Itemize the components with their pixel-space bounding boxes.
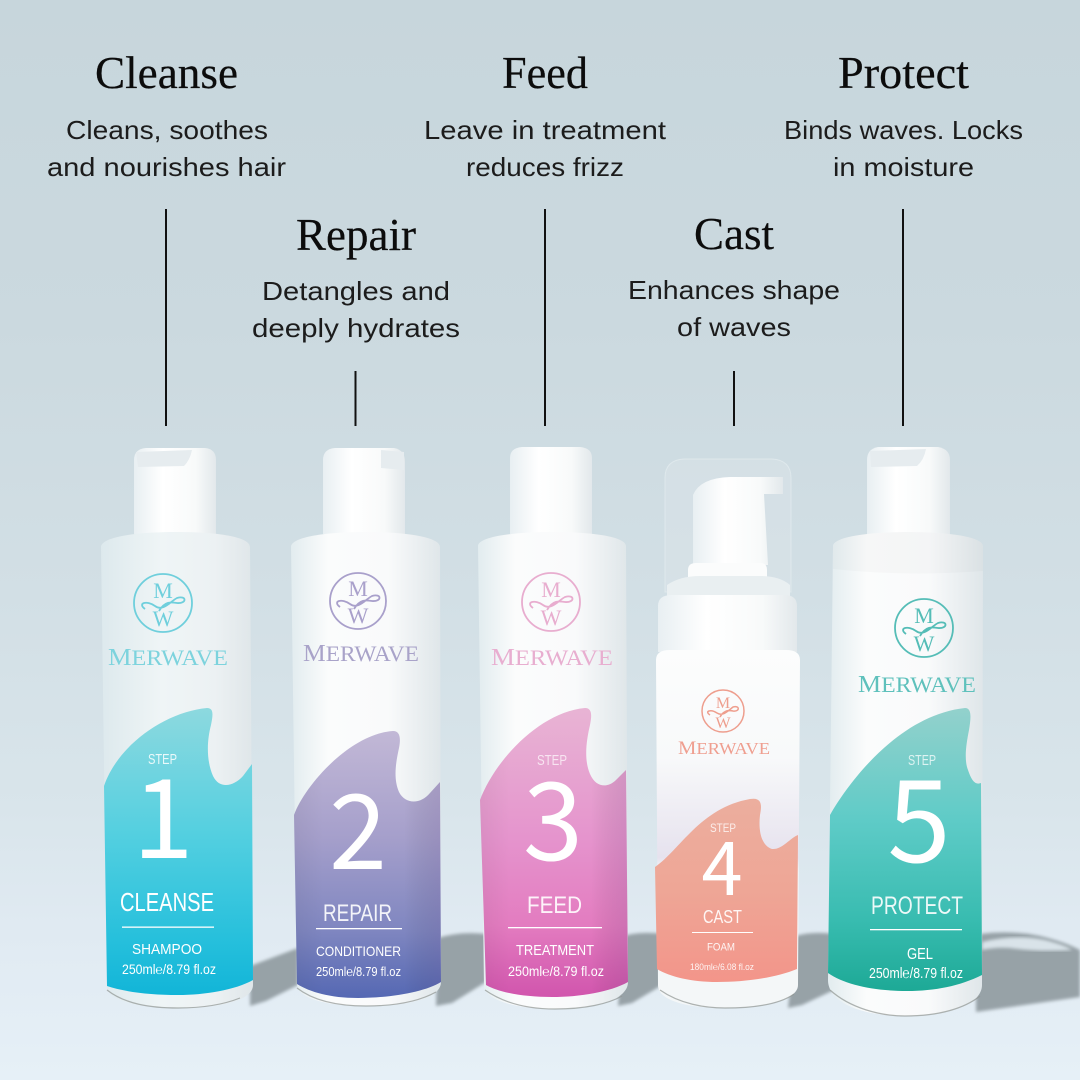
bottle 4: cast foam [655, 459, 800, 1008]
label wave [294, 731, 441, 998]
brand name: MERWAVE [303, 641, 419, 667]
step 2 heading: Repair: deeply hydrates [252, 313, 460, 343]
white collar [658, 595, 797, 652]
label text [120, 730, 216, 977]
step 3 heading: Feed: reduces frizz [466, 152, 624, 182]
label wave [480, 708, 628, 997]
label text: STEP [710, 821, 736, 835]
step 1 heading: Cleanse: Cleans, soothes [66, 115, 268, 145]
label text: CONDITIONER [316, 943, 401, 959]
bottle 2: repair conditioner [291, 448, 441, 1006]
step 1 heading: Cleanse: Cleanse [95, 47, 238, 98]
pump nozzle [693, 477, 783, 565]
label text: 250ml℮/8.79 fl.oz [508, 964, 604, 979]
step 2 heading: Repair: Detangles and [262, 276, 450, 306]
logo: W [541, 605, 562, 630]
step 4 heading: Cast: Enhances shape [628, 275, 840, 305]
logo: W [153, 606, 174, 631]
light patch in right shadow [982, 937, 1072, 951]
bottle body [101, 532, 253, 1008]
brand name: MERWAVE [108, 645, 228, 671]
label text [690, 810, 754, 973]
connector line: Feed [544, 209, 546, 426]
label text [316, 748, 402, 979]
label text: TREATMENT [516, 942, 594, 959]
logo: W [348, 603, 369, 628]
label text: 250ml℮/8.79 fl.oz [869, 965, 963, 982]
label text: 2 [329, 748, 387, 899]
logo [522, 573, 580, 631]
step 5 heading: Protect [784, 47, 1023, 182]
step 4 heading: Cast [628, 208, 840, 342]
label text: GEL [907, 946, 933, 963]
brand name: MERWAVE [491, 645, 613, 671]
label text: STEP [908, 752, 936, 769]
label text: 250ml℮/8.79 fl.oz [316, 964, 401, 979]
logo: W [715, 715, 731, 732]
logo: M [153, 578, 173, 603]
label text: STEP [148, 751, 177, 768]
connector line: Protect [902, 209, 904, 426]
brand name: MERWAVE [858, 672, 976, 698]
label text [508, 736, 604, 979]
base edge [297, 988, 436, 1006]
floor shadows [250, 932, 1080, 1012]
step 3 heading: Feed [424, 47, 667, 182]
bottle 3: feed treatment [478, 447, 628, 1009]
step 5 heading: Protect: Protect [838, 47, 969, 98]
pump collar [688, 563, 767, 580]
step 3 heading: Feed: Feed [502, 47, 588, 98]
bottle 5: protect gel [828, 447, 983, 1016]
logo [895, 599, 953, 657]
bottle body [291, 532, 441, 1006]
label text: FOAM [707, 942, 735, 954]
brand name: MERWAVE [678, 738, 770, 759]
logo: M [716, 695, 730, 712]
flip cap [134, 448, 216, 534]
shoulder band [833, 532, 983, 574]
step 5 heading: Protect: Binds waves. Locks [784, 115, 1023, 145]
logo: W [914, 631, 935, 656]
label text: PROTECT [871, 892, 963, 920]
step 2 heading: Repair [252, 209, 460, 343]
base edge [660, 990, 794, 1008]
wave side tint [294, 731, 441, 998]
base edge [107, 990, 240, 1008]
label text: SHAMPOO [132, 941, 202, 958]
logo: M [348, 576, 368, 601]
label wave [655, 799, 798, 982]
label text: CLEANSE [120, 887, 214, 917]
step 1 heading: Cleanse: and nourishes hair [47, 152, 286, 182]
connector line: Cleanse [165, 209, 167, 426]
base edge [830, 990, 980, 1016]
label text: 250ml℮/8.79 fl.oz [122, 962, 216, 977]
label text: REPAIR [323, 900, 392, 927]
label text: 3 [523, 736, 583, 892]
label text: FEED [527, 892, 582, 919]
step 3 heading: Feed: Leave in treatment [424, 115, 667, 145]
label text: STEP [537, 752, 567, 769]
flip cap [510, 447, 592, 534]
label text: 1 [132, 730, 194, 890]
connector line: Repair [354, 371, 356, 426]
logo [330, 573, 386, 629]
step 4 heading: Cast: of waves [677, 312, 791, 342]
bottle body [656, 650, 800, 1008]
label text: 4 [701, 810, 743, 917]
label text: CAST [703, 907, 742, 927]
flip cap [323, 448, 405, 534]
bottle body [478, 532, 628, 1009]
label text: 180ml℮/6.08 fl.oz [690, 962, 754, 973]
label text [869, 730, 963, 982]
wave side tint [480, 708, 628, 997]
step 1 heading: Cleanse [47, 47, 286, 182]
logo: M [914, 603, 934, 628]
step 2 heading: Repair: Repair [296, 209, 416, 260]
base ring [667, 576, 790, 597]
label text: 5 [887, 730, 951, 895]
logo: M [541, 577, 561, 602]
step 5 heading: Protect: in moisture [833, 152, 974, 182]
connector line: Cast [733, 371, 735, 426]
bottle body [828, 532, 983, 1016]
bottle 1: cleanse shampoo [101, 448, 253, 1008]
clear dome cap [665, 459, 791, 592]
label wave [104, 708, 253, 995]
logo [702, 690, 744, 732]
logo [134, 574, 192, 632]
step 4 heading: Cast: Cast [694, 208, 774, 259]
base edge [485, 990, 622, 1009]
label wave [828, 708, 982, 991]
flip cap [867, 447, 950, 534]
